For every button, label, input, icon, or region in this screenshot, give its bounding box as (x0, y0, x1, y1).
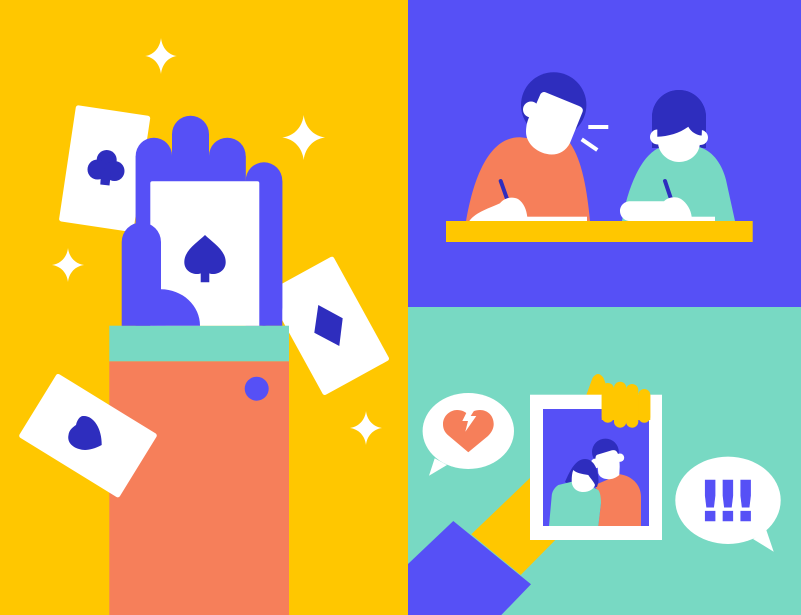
cuff button (245, 377, 269, 401)
ears (650, 130, 665, 144)
hidden card: spade (150, 181, 259, 326)
icon: spade (184, 235, 226, 282)
figure: man peeking (466, 72, 608, 222)
panel: cheating at cards (0, 0, 408, 615)
teal shirt (622, 147, 735, 221)
yellow arm (471, 374, 610, 575)
icon: sparkles (52, 38, 382, 445)
couple in photo (549, 439, 641, 526)
icon: heart (68, 416, 102, 450)
woman hair (565, 459, 598, 487)
orange shirt (466, 137, 590, 221)
glance lines (582, 127, 608, 150)
desk (446, 221, 753, 242)
hand holding card (122, 116, 282, 326)
exclamation marks: !!! (697, 470, 751, 535)
paper (691, 217, 715, 222)
photo frame (530, 382, 662, 540)
figure: student writing (620, 90, 735, 222)
speech bubble: exclamation (675, 457, 781, 552)
pen (665, 181, 671, 198)
hand holding photo (602, 382, 650, 428)
face (526, 92, 583, 154)
man hair (592, 439, 619, 465)
card: club (59, 105, 151, 232)
hair back (652, 90, 706, 148)
blue sleeve (408, 521, 531, 615)
icon: club (88, 150, 124, 186)
panel: stalking a photo (408, 307, 801, 615)
ear (523, 102, 539, 118)
man shirt (595, 474, 641, 526)
woman face (572, 470, 595, 492)
paper (527, 217, 587, 222)
man ears (616, 454, 624, 462)
icon: lightning crack (462, 411, 476, 432)
face (658, 120, 700, 162)
pen (501, 181, 507, 198)
arm (620, 197, 692, 221)
hair (521, 72, 586, 138)
panel: copying in class (408, 0, 801, 307)
sleeve (109, 326, 289, 615)
card: diamond (267, 256, 390, 396)
card: heart (18, 373, 158, 498)
speech bubble: broken heart (423, 393, 514, 476)
man face (596, 450, 620, 479)
thumb (122, 222, 200, 326)
arm (469, 198, 527, 221)
woman shirt (549, 482, 601, 526)
icon: diamond (314, 305, 343, 346)
bangs (652, 90, 706, 137)
icon: heart (443, 410, 494, 452)
